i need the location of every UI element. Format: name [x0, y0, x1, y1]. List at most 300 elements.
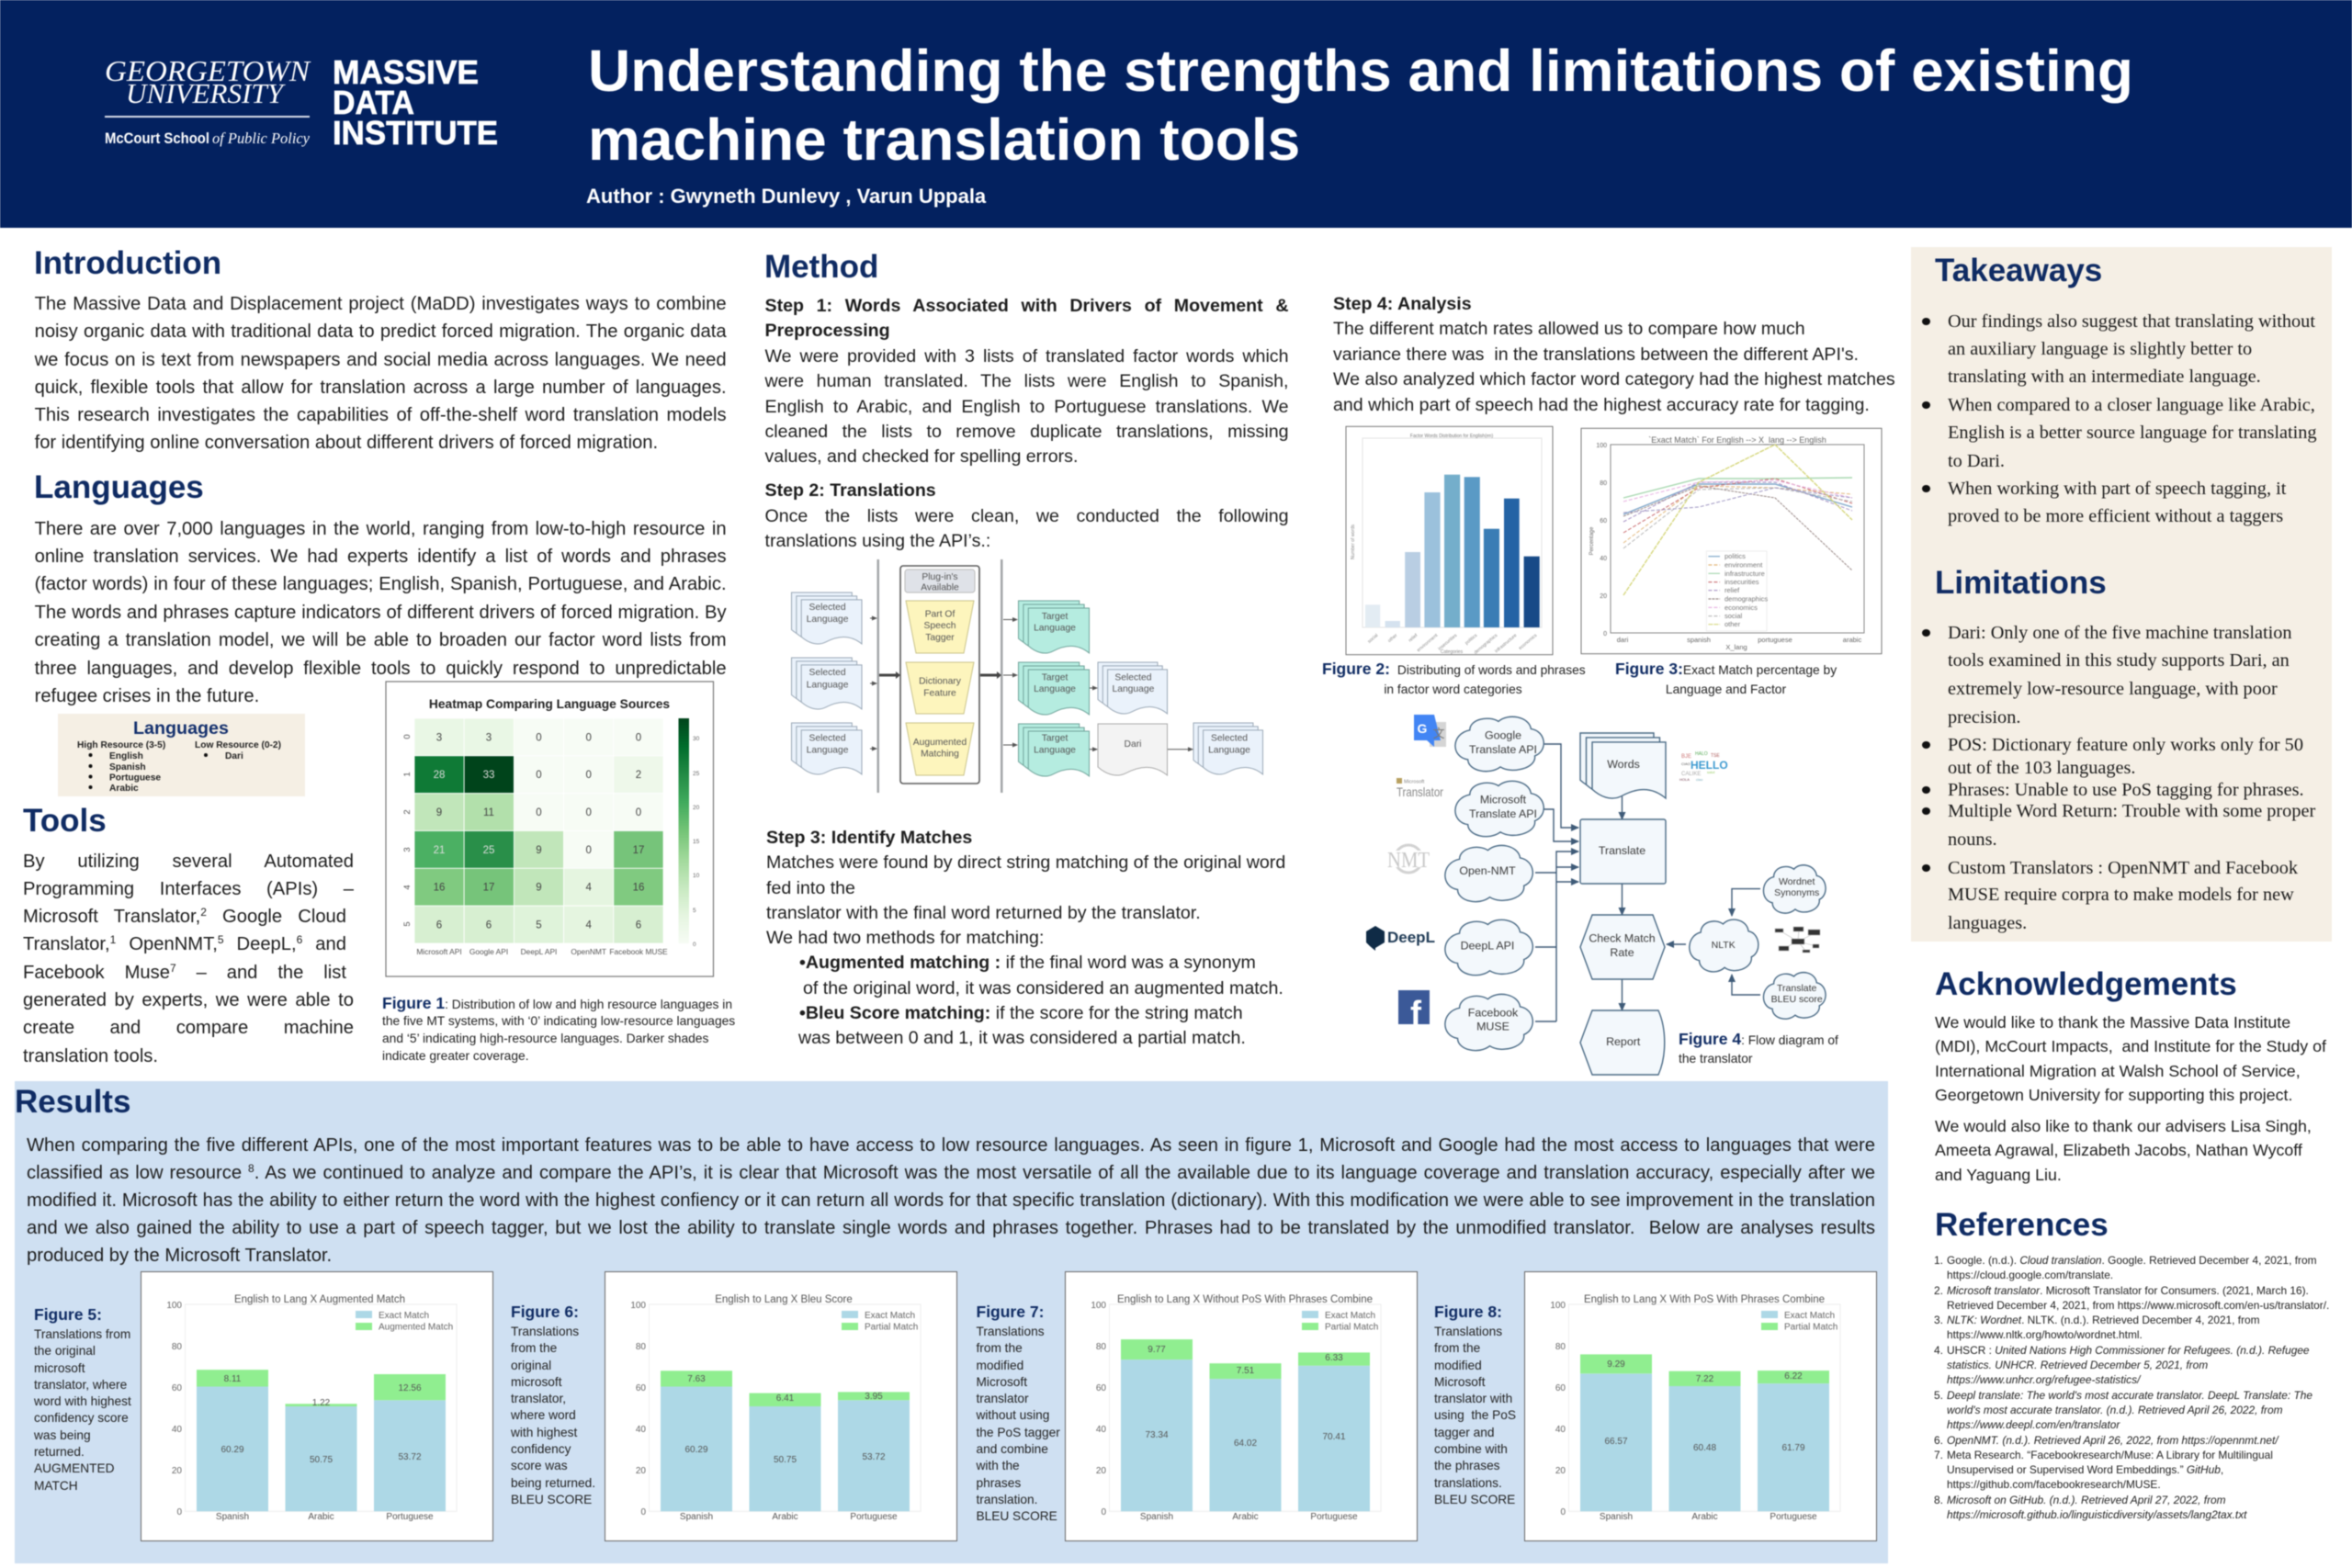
- diagram: figure 4 translator flow: Translate: [1777, 983, 1817, 994]
- chart: heatmap comparing language sources: 9: [536, 883, 542, 894]
- chart: heatmap comparing language sources: 9: [536, 845, 542, 856]
- text: results: modified it. Microsoft has the ability to either return the word with the highest confiency or it can return all words for that specific translation (dictionary). With this modification we were able to see improvement in the translation: [27, 1190, 1875, 1211]
- caption: figure 6: Figure 6:: [511, 1303, 579, 1321]
- diagram: translation pipeline: Speech: [924, 621, 956, 631]
- caption: figure 1: Figure 1: Distribution of low and high resource languages in: [382, 994, 732, 1012]
- text: tools: Microsoft Translator,2 Google Cloud: [23, 906, 346, 927]
- text: step 1: We were provided with 3 lists of translated factor words which: [764, 346, 1288, 367]
- text: step 4: variance there was in the translations between the different API's.: [1333, 344, 1859, 364]
- heading: Takeaways: Takeaways: [1935, 252, 2102, 288]
- chart: figure 6 bleu score: 0: [640, 1507, 646, 1517]
- header banner: [0, 0, 2352, 228]
- list: limitations: tools examined in this study supports Dari, an: [1948, 650, 2290, 671]
- chart: heatmap comparing language sources: 16: [633, 883, 644, 894]
- caption: figure 5: AUGMENTED: [34, 1461, 114, 1475]
- chart: figure 2 factor word distribution: politics: [1464, 633, 1479, 646]
- caption: figure 8: BLEU SCORE: [1434, 1493, 1515, 1506]
- text: step 1: Preprocessing: [764, 321, 890, 341]
- chart: figure 2 factor word distribution: [1345, 425, 1555, 656]
- caption: figure 3: [1615, 660, 1838, 697]
- heading: Acknowledgements: Acknowledgements: [1935, 966, 2237, 1001]
- list: references: OpenNMT. (n.d.). Retrieved April 26, 2022, from https://opennmt.net/: [1947, 1434, 2278, 1447]
- panel: languages resource box: Arabic: [109, 784, 139, 794]
- chart: figure 3 exact match line chart: 0: [1603, 631, 1607, 637]
- text: introduction: The Massive Data and Displacement project (MaDD) investigates ways to combine: [35, 294, 727, 314]
- chart: figure 6 bleu score: 50.75: [774, 1455, 797, 1465]
- list: references: 4.: [1934, 1344, 1943, 1357]
- caption: figure 1: the five MT systems, with ‘0’ indicating low-resource languages: [382, 1014, 735, 1028]
- text: introduction: for identifying online conversation about different drivers of forced migration.: [35, 433, 658, 453]
- caption: figure 5: Translations from: [34, 1327, 130, 1341]
- chart: heatmap comparing language sources: 5: [536, 920, 542, 931]
- caption: figure 7: modified: [976, 1359, 1023, 1372]
- diagram: translation pipeline: Selected: [809, 733, 846, 744]
- caption: figure 6: microsoft: [511, 1375, 562, 1389]
- heading: Tools: Tools: [23, 803, 107, 839]
- list: references: Retrieved December 4, 2021, from https://www.microsoft.com/en-us/translator/.: [1947, 1299, 2329, 1312]
- text: tools: Programming Interfaces (APIs) –: [23, 879, 354, 899]
- chart: heatmap comparing language sources: 6: [436, 920, 442, 931]
- caption: figure 7: the PoS tagger: [976, 1426, 1060, 1439]
- chart: figure 3 exact match line chart: portuguese: [1758, 636, 1792, 644]
- list: takeaways: English is a better source language for translating: [1948, 423, 2317, 443]
- caption: figure 7: BLEU SCORE: [976, 1509, 1057, 1523]
- text: step 4: [1332, 294, 1895, 415]
- chart: figure 6 bleu score: Exact Match: [865, 1311, 915, 1321]
- chart: figure 7 without PoS: 80: [1096, 1342, 1106, 1352]
- chart: figure 5 augmented match: 8.11: [223, 1374, 241, 1384]
- list: references: https://www.deepl.com/en/translator: [1947, 1418, 2120, 1431]
- chart: figure 5 augmented match: 53.72: [398, 1452, 422, 1462]
- diagram: translation pipeline: [790, 558, 1264, 794]
- caption: figure 8: Figure 8:: [1434, 1303, 1502, 1321]
- list: limitations: Phrases: Unable to use PoS tagging for phrases.: [1948, 779, 2304, 799]
- list: references: Unsupervised or Supervised Word Embeddings.” GitHub,: [1947, 1463, 2223, 1476]
- chart: figure 5 augmented match: Arabic: [308, 1512, 334, 1522]
- text: languages: creating a translation model, we will be able to broaden our factor word lists from: [35, 630, 727, 650]
- heading: Method: Method: [764, 248, 878, 285]
- chart: figure 3 exact match line chart: `Exact Match` For English --> X_lang --> English: [1648, 435, 1826, 445]
- text: step 3: was between 0 and 1, it was considered a partial match.: [798, 1028, 1246, 1048]
- chart: figure 8 with PoS: 60: [1555, 1383, 1566, 1393]
- text: step 1: [764, 296, 1289, 467]
- caption: figure 5: confidency score: [34, 1411, 129, 1425]
- chart: heatmap comparing language sources: 3: [436, 732, 442, 743]
- text: tools: translation tools.: [23, 1046, 158, 1066]
- diagram: figure 4 translator flow: Synonyms: [1774, 887, 1819, 898]
- chart: heatmap comparing language sources: 10: [693, 873, 700, 879]
- list: limitations: MUSE require corpra to make models for new: [1948, 885, 2294, 905]
- chart: heatmap comparing language sources: 0: [636, 807, 641, 818]
- chart: heatmap comparing language sources: 0: [536, 770, 542, 781]
- panel: languages resource box: [57, 713, 305, 797]
- text: languages: refugee crises in the future.: [35, 686, 259, 706]
- chart: heatmap comparing language sources: 4: [585, 920, 592, 931]
- caption: figure 6: from the: [511, 1341, 557, 1355]
- chart: figure 3 exact match line chart: economics: [1724, 604, 1758, 612]
- chart: figure 3 exact match line chart: [1580, 427, 1883, 655]
- chart: heatmap comparing language sources: 11: [483, 807, 494, 818]
- chart: figure 3 exact match line chart: politics: [1724, 552, 1746, 560]
- chart: figure 2 factor word distribution: Number of words: [1351, 524, 1356, 559]
- list: limitations: extremely low-resource language, with poor: [1948, 679, 2278, 699]
- caption: figure 1: indicate greater coverage.: [382, 1049, 529, 1063]
- text: step 4: We also analyzed which factor word category had the highest matches: [1333, 369, 1895, 389]
- caption: figure 1: [382, 994, 735, 1064]
- text: acknowledgements: [1935, 1012, 2327, 1185]
- icon: Microsoft Translator: Microsoft: [1404, 779, 1425, 784]
- diagram: figure 4 translator flow: Check Match: [1589, 931, 1656, 944]
- list: references: https://cloud.google.com/translate.: [1947, 1269, 2113, 1281]
- text: languages: online translation services. We had experts identify a list of words and phrases: [35, 547, 727, 567]
- chart: figure 5 augmented match: 80: [172, 1342, 182, 1352]
- chart: heatmap comparing language sources: 0: [536, 732, 542, 743]
- chart: heatmap comparing language sources: 28: [434, 770, 445, 781]
- chart: figure 2 factor word distribution: insecurities: [1437, 633, 1459, 652]
- text: introduction: we focus on is text from newspapers and social media across languages. We need: [35, 349, 727, 369]
- diagram: translation pipeline: Language: [807, 615, 849, 625]
- list: references: statistics. UNHCR. Retrieved December 5, 2021, from: [1947, 1359, 2208, 1371]
- diagram: figure 4 translator flow: Open-NMT: [1459, 864, 1516, 877]
- chart: figure 6 bleu score: 60.29: [684, 1445, 708, 1455]
- list: limitations: precision.: [1948, 707, 2020, 728]
- text: tools: Translator,1 OpenNMT,5 DeepL,6 and: [23, 933, 346, 954]
- text: step 4: and which part of speech had the highest accuracy rate for tagging.: [1333, 395, 1870, 415]
- caption: figure 7: phrases: [976, 1476, 1021, 1490]
- chart: figure 5 augmented match: 100: [166, 1301, 182, 1311]
- chart: figure 8 with PoS: 61.79: [1781, 1443, 1805, 1453]
- text: step 3: [766, 828, 1285, 1048]
- text: step 1: English to Arabic, and English to Portuguese translations. We: [764, 397, 1288, 417]
- text: languages: The words and phrases capture indicators of different drivers of forced migration. By: [35, 603, 727, 623]
- chart: figure 8 with PoS: 9.29: [1607, 1359, 1625, 1370]
- panel: languages resource box: Languages: [133, 718, 229, 739]
- chart: figure 3 exact match line chart: X_lang: [1725, 643, 1747, 651]
- chart: figure 7 without PoS: 9.77: [1148, 1345, 1166, 1355]
- diagram: translation pipeline: Dictionary: [919, 676, 962, 687]
- chart: figure 6 bleu score: 3.95: [865, 1392, 883, 1402]
- chart: figure 5 augmented match: 1.22: [311, 1398, 330, 1408]
- diagram: figure 4 translator flow: Report: [1606, 1035, 1641, 1048]
- list: takeaways: When working with part of speech tagging, it: [1948, 479, 2286, 499]
- chart: figure 2 factor word distribution: economics: [1518, 633, 1539, 651]
- diagram: translation pipeline: Augumented: [913, 738, 967, 748]
- list: references: Meta Research. “Facebookresearch/Muse: A Library for Multilingual: [1947, 1449, 2273, 1461]
- panel: results: [15, 1081, 1888, 1563]
- caption: figure 6: original: [511, 1359, 551, 1372]
- chart: figure 3 exact match line chart: social: [1724, 612, 1743, 620]
- list: takeaways: [1921, 310, 2317, 527]
- diagram: translation pipeline: Language: [807, 746, 849, 755]
- chart: figure 6 bleu score: 80: [636, 1342, 646, 1352]
- heading: References: References: [1935, 1207, 2109, 1242]
- chart: figure 8 with PoS: 66.57: [1604, 1437, 1628, 1447]
- caption: figure 2: in factor word categories: [1384, 682, 1522, 696]
- chart: figure 7 without PoS: 60: [1096, 1383, 1106, 1393]
- list: references: 2.: [1934, 1284, 1943, 1297]
- list: references: 6.: [1934, 1434, 1943, 1447]
- chart: figure 3 exact match line chart: 60: [1600, 518, 1607, 525]
- icon: hello word cloud: CIAO: [1681, 761, 1690, 766]
- chart: heatmap comparing language sources: Facebook MUSE: [609, 947, 668, 956]
- diagram: figure 4 translator flow: [1365, 714, 1826, 1077]
- caption: figure 4: Figure 4: Flow diagram of: [1679, 1029, 1838, 1047]
- diagram: figure 4 translator flow: Wordnet: [1779, 876, 1815, 887]
- list: references: 5.: [1934, 1389, 1943, 1402]
- chart: figure 2 factor word distribution: social: [1367, 633, 1379, 645]
- caption: figure 4: [1678, 1029, 1839, 1066]
- chart: figure 7 without PoS: 100: [1091, 1301, 1106, 1311]
- chart: figure 2 factor word distribution: demographics: [1473, 633, 1499, 656]
- diagram: translation pipeline: Target: [1042, 733, 1068, 744]
- text: step 2: translations using the API’s.:: [764, 531, 990, 551]
- chart: figure 8 with PoS: 60.48: [1693, 1443, 1716, 1453]
- chart: figure 3 exact match line chart: arabic: [1843, 636, 1861, 644]
- icon: hello word cloud: BJE: [1681, 754, 1691, 760]
- text: languages: [34, 518, 728, 706]
- chart: figure 8 with PoS: Partial Match: [1784, 1323, 1838, 1332]
- icon: hello word cloud: HELLO: [1690, 759, 1728, 772]
- chart: figure 8 with PoS: 6.22: [1784, 1371, 1803, 1382]
- text: step 3: We had two methods for matching:: [766, 928, 1044, 948]
- chart: heatmap comparing language sources: Google API: [469, 947, 508, 956]
- chart: heatmap comparing language sources: 0: [585, 732, 592, 743]
- caption: figure 7: translator: [976, 1392, 1029, 1405]
- list: limitations: Multiple Word Return: Trouble with some proper: [1948, 801, 2315, 821]
- diagram: translation pipeline: Tagger: [925, 633, 955, 643]
- diagram: figure 4 translator flow: Translate API: [1469, 807, 1537, 820]
- text: languages: (factor words) in four of these languages; English, Spanish, Portuguese, and Arabic.: [35, 574, 727, 594]
- chart: figure 8 with PoS: 0: [1560, 1507, 1566, 1517]
- list: references: Microsoft on GitHub. (n.d.). Retrieved April 27, 2022, from: [1947, 1494, 2226, 1506]
- text: step 1: values, and checked for spelling errors.: [764, 446, 1078, 467]
- chart: heatmap comparing language sources: 3: [402, 847, 413, 852]
- text: introduction: quick, flexible tools that allow for translation across a large number of languages.: [35, 378, 727, 398]
- chart: heatmap comparing language sources: 3: [486, 732, 492, 743]
- list: limitations: languages.: [1948, 913, 2027, 933]
- chart: heatmap comparing language sources: 0: [402, 734, 413, 739]
- chart: figure 3 exact match line chart: 100: [1596, 443, 1607, 449]
- list: limitations: Dari: Only one of the five machine translation: [1948, 623, 2292, 643]
- icon: Google Translate: 文: [1432, 727, 1445, 740]
- text: languages: There are over 7,000 languages in the world, ranging from low-to-high resource in: [35, 518, 727, 538]
- logo: Georgetown University McCourt School: GEORGETOWN: [105, 54, 311, 87]
- icon: DeepL: DeepL: [1387, 929, 1435, 946]
- chart: figure 3 exact match line chart: 80: [1600, 480, 1607, 487]
- text: tools: [22, 851, 355, 1066]
- chart: figure 7 without PoS: Arabic: [1232, 1512, 1259, 1522]
- logo: Georgetown University McCourt School: of Public Policy: [212, 130, 310, 147]
- chart: figure 7 without PoS: Exact Match: [1325, 1311, 1375, 1321]
- chart: figure 2 factor word distribution: Factor Words Distribution for English(en): [1410, 434, 1493, 439]
- list: takeaways: to Dari.: [1948, 451, 2005, 471]
- chart: figure 8 with PoS: 7.22: [1696, 1374, 1714, 1384]
- text: tools: Facebook Muse7 – and the list: [23, 962, 346, 983]
- chart: figure 3 exact match line chart: environment: [1724, 560, 1763, 570]
- diagram: translation pipeline: Language: [1112, 684, 1155, 694]
- chart: figure 8 with PoS: Portuguese: [1770, 1512, 1817, 1522]
- text: acknowledgements: We would also like to thank our advisers Lisa Singh,: [1935, 1117, 2312, 1135]
- text: step 3: Matches were found by direct string matching of the original word: [766, 852, 1285, 873]
- list: references: Deepl translate: The world's most accurate translator. DeepL Translate: The: [1947, 1389, 2312, 1402]
- chart: heatmap comparing language sources: 1: [402, 772, 413, 777]
- caption: figure 5: returned.: [34, 1445, 85, 1459]
- list: references: https://www.unhcr.org/refugee-statistics/: [1947, 1373, 2140, 1386]
- diagram: figure 4 translator flow: Rate: [1610, 946, 1634, 959]
- chart: heatmap comparing language sources: OpenNMT: [571, 947, 606, 956]
- chart: heatmap comparing language sources: 17: [483, 883, 494, 894]
- chart: figure 6 bleu score: 20: [636, 1466, 646, 1476]
- chart: figure 7 without PoS: 64.02: [1234, 1438, 1257, 1449]
- list: limitations: out of the 103 languages.: [1948, 758, 2135, 778]
- chart: figure 8 with PoS: 40: [1555, 1425, 1566, 1435]
- chart: figure 7 without PoS: Portuguese: [1310, 1512, 1358, 1522]
- chart: heatmap comparing language sources: 2: [636, 770, 641, 781]
- list: takeaways: an auxiliary language is slightly better to: [1948, 339, 2252, 359]
- list: limitations: [1921, 623, 2316, 933]
- logo: Massive Data Institute: DATA: [333, 84, 414, 121]
- caption: figure 6: translator,: [511, 1392, 566, 1405]
- diagram: figure 4 translator flow: NLTK: [1712, 940, 1736, 951]
- icon: hello word cloud: TSE: [1711, 753, 1720, 759]
- caption: figure 7: with the: [976, 1459, 1020, 1472]
- authors: Author : Gwyneth Dunlevy , Varun Uppala: [586, 185, 986, 208]
- chart: figure 5 augmented match: Augmented Match: [379, 1323, 453, 1332]
- icon: hello word cloud: salut: [1707, 770, 1715, 774]
- icon: hello word cloud: [1679, 751, 1728, 782]
- chart: figure 2 factor word distribution: infrastructure: [1494, 633, 1518, 654]
- diagram: translation pipeline: Selected: [1211, 733, 1248, 744]
- panel: languages resource box: Dari: [225, 751, 243, 761]
- diagram: figure 4 translator flow: Microsoft: [1480, 794, 1527, 807]
- chart: figure 5 augmented match: 12.56: [398, 1383, 422, 1393]
- caption: figure 6: [510, 1303, 595, 1506]
- chart: heatmap comparing language sources: 0: [693, 942, 696, 948]
- diagram: translation pipeline: Matching: [921, 750, 959, 759]
- chart: heatmap comparing language sources: 9: [436, 807, 442, 818]
- diagram: translation pipeline: Part Of: [925, 610, 955, 619]
- icon: word network: [1775, 927, 1820, 953]
- chart: figure 2 factor word distribution: relief: [1408, 633, 1419, 644]
- text: step 4: Step 4: Analysis: [1333, 294, 1472, 314]
- list: takeaways: When compared to a closer language like Arabic,: [1948, 395, 2315, 415]
- diagram: translation pipeline: Selected: [1114, 672, 1152, 683]
- chart: figure 7 without PoS: 7.51: [1237, 1366, 1255, 1376]
- list: takeaways: Our findings also suggest that translating without: [1948, 310, 2315, 331]
- chart: figure 3 exact match line chart: 40: [1600, 556, 1607, 562]
- list: references: Microsoft translator. Microsoft Translator for Consumers. (2021, March 16).: [1947, 1284, 2309, 1297]
- chart: heatmap comparing language sources: 0: [585, 845, 592, 856]
- chart: figure 5 augmented match: 50.75: [310, 1455, 333, 1465]
- caption: figure 5: the original: [34, 1344, 96, 1358]
- chart: figure 7 without PoS: 0: [1101, 1507, 1106, 1517]
- chart: figure 3 exact match line chart: dari: [1617, 636, 1629, 644]
- panel: languages resource box: Portuguese: [109, 773, 161, 783]
- chart: figure 8 with PoS: 20: [1555, 1466, 1566, 1476]
- icon: Google Translate: [1414, 715, 1446, 747]
- chart: heatmap comparing language sources: 5: [402, 921, 413, 927]
- list: references: https://github.com/facebookresearch/MUSE.: [1947, 1478, 2161, 1491]
- icon: OpenNMT: NMT: [1387, 849, 1430, 873]
- list: references: Google. (n.d.). Cloud translation. Google. Retrieved December 4, 2021, from: [1947, 1254, 2317, 1267]
- chart: figure 6 bleu score: English to Lang X Bleu Score: [715, 1294, 853, 1305]
- diagram: translation pipeline: Language: [1208, 746, 1250, 755]
- diagram: translation pipeline: Dari: [1125, 739, 1141, 750]
- diagram: translation pipeline: Available: [921, 582, 959, 593]
- diagram: translation pipeline: Language: [1034, 623, 1076, 634]
- diagram: translation pipeline: Selected: [809, 603, 846, 613]
- chart: figure 8 with PoS: 80: [1555, 1342, 1566, 1352]
- diagram: translation pipeline: Language: [807, 680, 849, 691]
- chart: figure 7 without PoS: Spanish: [1140, 1512, 1173, 1522]
- chart: figure 8 with PoS: 100: [1550, 1301, 1566, 1311]
- chart: figure 2 factor word distribution: environment: [1416, 633, 1440, 653]
- chart: figure 6 bleu score: 53.72: [862, 1452, 886, 1462]
- icon: hello word cloud: HOLA: [1679, 777, 1690, 782]
- panel: takeaways and limitations: [1911, 247, 2332, 942]
- chart: figure 2 factor word distribution: other: [1387, 633, 1399, 644]
- chart: heatmap comparing language sources: 2: [402, 809, 413, 815]
- logo: Massive Data Institute: INSTITUTE: [333, 114, 498, 151]
- caption: figure 2: [1322, 660, 1586, 697]
- caption: figure 8: tagger and: [1434, 1426, 1494, 1439]
- caption: figure 5: was being: [34, 1428, 91, 1442]
- icon: Facebook: [1398, 990, 1430, 1032]
- list: references: https://www.nltk.org/howto/wordnet.html.: [1947, 1328, 2143, 1341]
- chart: figure 6 bleu score: Partial Match: [865, 1323, 918, 1332]
- chart: heatmap comparing language sources: 15: [693, 839, 700, 845]
- icon: Microsoft Translator: [1396, 778, 1443, 799]
- list: limitations: nouns.: [1948, 829, 1997, 850]
- chart: figure 5 augmented match: English to Lang X Augmented Match: [234, 1294, 405, 1305]
- title: [588, 38, 2133, 173]
- chart: heatmap comparing language sources: 4: [402, 885, 413, 890]
- text: acknowledgements: Georgetown University for supporting this project.: [1935, 1086, 2292, 1104]
- text: tools: generated by experts, we were able to: [23, 990, 354, 1010]
- chart: heatmap comparing language sources: 33: [483, 770, 494, 781]
- chart: heatmap comparing language sources: Heatmap Comparing Language Sources: [429, 697, 670, 711]
- chart: figure 8 with PoS: Arabic: [1691, 1512, 1718, 1522]
- text: step 1: Step 1: Words Associated with Drivers of Movement &: [764, 296, 1288, 316]
- chart: heatmap comparing language sources: 4: [585, 883, 592, 894]
- panel: languages resource box: English: [109, 751, 143, 761]
- chart: figure 6 bleu score: 7.63: [687, 1374, 706, 1384]
- text: step 2: Once the lists were clean, we conducted the following: [764, 505, 1288, 525]
- caption: figure 8: the phrases: [1434, 1459, 1500, 1472]
- chart: heatmap comparing language sources: 6: [636, 920, 641, 931]
- icon: hello word cloud: CALIKE: [1681, 772, 1701, 777]
- diagram: figure 4 translator flow: BLEU score: [1771, 994, 1823, 1005]
- chart: figure 6 bleu score: 40: [636, 1425, 646, 1435]
- text: languages: three languages, and develop flexible tools to quickly respond to unpredictable: [35, 659, 727, 679]
- panel: languages resource box: Low Resource (0-2): [195, 740, 281, 750]
- chart: figure 3 exact match line chart: insecurities: [1724, 578, 1759, 586]
- text: step 1: cleaned the lists to remove duplicate translations, missing: [764, 422, 1288, 442]
- heading: Results: Results: [15, 1084, 130, 1120]
- diagram: translation pipeline: Target: [1042, 672, 1068, 683]
- text: introduction: This research investigates the capabilities of off-the-shelf word translation models: [35, 405, 727, 425]
- chart: figure 8 with PoS: [1523, 1270, 1878, 1542]
- list: limitations: POS: Dictionary feature only works only for 50: [1948, 735, 2303, 755]
- text: acknowledgements: International Migration at Walsh School of Service,: [1935, 1062, 2301, 1080]
- text: step 3: •Augmented matching : if the final word was a synonym: [799, 953, 1256, 973]
- text: acknowledgements: (MDI), McCourt Impacts, and Institute for the Study of: [1935, 1037, 2326, 1055]
- chart: heatmap comparing language sources: 25: [693, 771, 700, 777]
- chart: heatmap comparing language sources: 30: [693, 736, 700, 742]
- chart: figure 3 exact match line chart: spanish: [1687, 636, 1711, 644]
- text: step 3: fed into the: [766, 878, 855, 898]
- logo: Georgetown University McCourt School: McCourt School: [105, 130, 209, 147]
